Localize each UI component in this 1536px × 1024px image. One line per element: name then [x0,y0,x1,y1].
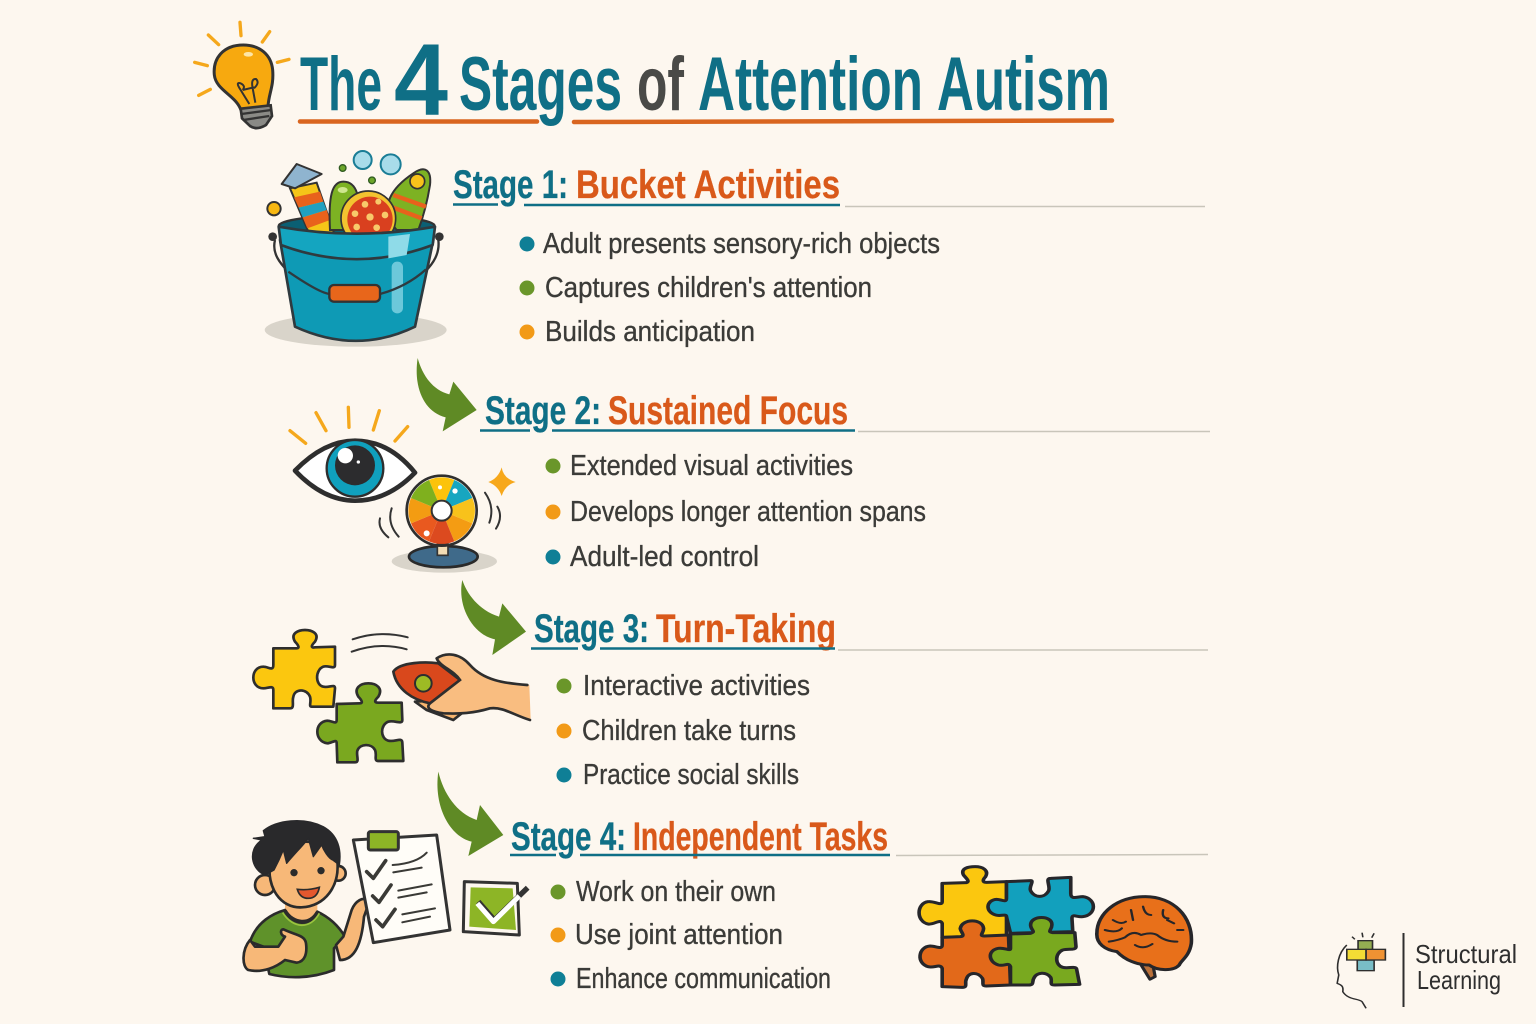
bullet list: stage 1: Captures children's attention [545,272,872,304]
icon: checklist clipboard [353,832,450,943]
bullet list: stage 3: Children take turns [582,715,796,747]
bullet list: stage 4 [550,876,831,995]
icon: green puzzle piece [317,683,403,762]
bullet list: stage 3: Practice social skills [583,759,799,791]
heading: stage 2 [480,389,1210,433]
bullet list: stage 1: Builds anticipation [545,316,755,348]
title [300,23,1112,137]
heading: stage 1 [453,163,1205,207]
toy: striped rocket [282,164,334,234]
bullet list: stage 2: Adult-led control [570,541,759,573]
icon: bucket of sensory toys [265,151,447,347]
bullet list: stage 2: Extended visual activities [570,450,853,482]
bullet list: stage 2: Develops longer attention spans [570,496,926,528]
title: 4 [394,23,448,137]
arrow: stage 3 to stage 4 [437,772,503,856]
bullet list: stage 1 [520,228,940,348]
bullet list: stage 4: Enhance communication [576,963,831,995]
heading: stage 3 [531,607,1208,651]
bullet list: stage 1: Adult presents sensory-rich objects [543,228,940,260]
bullet list: stage 2 [546,450,926,573]
title: Stages [459,42,622,127]
heading: stage 4: Independent Tasks [633,815,888,859]
arrow: stage 2 to stage 3 [461,580,526,655]
heading: stage 4: Stage 4: [511,815,626,859]
icon: hand passing toy [352,634,531,720]
icon: brain [1097,897,1191,979]
title: of [637,42,684,127]
bullet list: stage 3: Interactive activities [583,670,810,702]
bullet list: stage 3 [556,670,810,791]
heading: stage 3: Turn-Taking [656,607,836,651]
icon: light bulb [195,22,289,128]
heading: stage 4 [510,815,1208,859]
logo: Structural Learning: Structural [1415,939,1517,969]
title: The [300,42,382,127]
arrow: stage 1 to stage 2 [417,358,477,431]
icon: eye [290,407,415,501]
logo: Structural Learning: Learning [1417,965,1501,995]
heading: stage 1: Bucket Activities [576,163,840,207]
bullet list: stage 4: Work on their own [576,876,776,908]
icon: four-piece puzzle [919,867,1093,987]
title: Attention [698,42,923,127]
icon: spinning wheel toy [379,467,516,573]
heading: stage 3: Stage 3: [534,607,649,651]
icon: child with thumbs up [244,821,369,977]
toy: dotted ball [341,191,396,246]
heading: stage 1: Stage 1: [453,163,568,207]
icon: green check box [463,882,528,935]
heading: stage 2: Stage 2: [485,389,601,433]
bullet list: stage 4: Use joint attention [575,919,783,951]
icon: yellow puzzle piece [253,630,335,708]
heading: stage 2: Sustained Focus [608,389,848,433]
logo: Structural Learning [1337,933,1517,1008]
title: Autism [937,42,1110,127]
